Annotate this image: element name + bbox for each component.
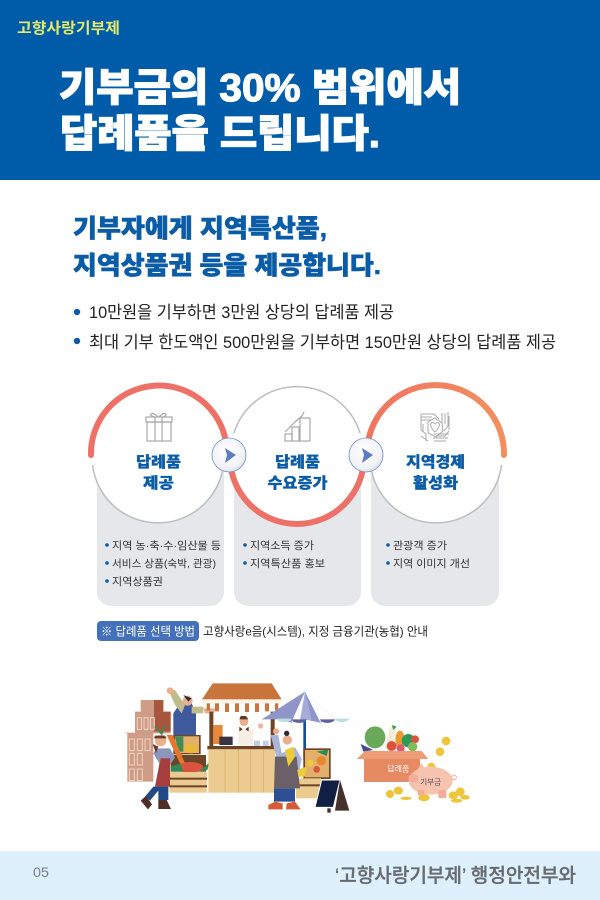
- list: 지역소득 증가: [250, 540, 314, 552]
- bullet list: 최대 기부 한도액인 500만원을 기부하면 150만원 상당의 답례품 제공: [89, 333, 556, 352]
- cycle diagram: [91, 385, 504, 606]
- bullet list: [74, 303, 556, 352]
- panel: 지역경제 활성화: [368, 385, 504, 606]
- list: 지역특산품 홍보: [250, 557, 325, 570]
- vendor in blue: [167, 687, 217, 735]
- icon: bar chart: [285, 412, 310, 441]
- bullet list: 10만원을 기부하면 3만원 상당의 답례품 제공: [89, 303, 394, 322]
- produce stand right: [296, 748, 331, 798]
- list: 지역상품권: [112, 576, 163, 588]
- panel: 지역경제 활성화: 활성화: [413, 474, 458, 492]
- footer band: [0, 851, 600, 900]
- list: 서비스 상품(숙박, 관광): [112, 558, 216, 570]
- title: 답례품을 드립니다.: [60, 113, 380, 156]
- subheading: 기부자에게 지역특산품,: [73, 215, 327, 243]
- panel: 답례품 제공: [91, 386, 226, 606]
- footer text: ‘고향사랑기부제’ 행정안전부와: [335, 865, 576, 887]
- list: [243, 540, 325, 570]
- woman with flowers: [268, 728, 307, 809]
- icon: hands and heart: [421, 412, 449, 441]
- sign board: [315, 780, 349, 813]
- list: [105, 539, 221, 588]
- vegetables: [361, 725, 419, 752]
- piggy bank: 기부금: [420, 777, 441, 786]
- list: 지역 농·축·수·임산물 등: [112, 539, 221, 552]
- produce crates left: [169, 735, 210, 793]
- illustration: gift box and piggy bank: [357, 725, 470, 803]
- title: 기부금의 30% 범위에서: [59, 67, 461, 110]
- panel: 답례품 수요증가: [230, 387, 364, 606]
- subheading: [73, 215, 381, 280]
- box: 답례품: [387, 764, 409, 774]
- chef: [238, 730, 253, 745]
- panel: 답례품 제공: 답례품: [136, 454, 181, 471]
- list: 관광객 증가: [393, 540, 447, 552]
- illustration: market: [125, 683, 349, 813]
- umbrella: [262, 692, 349, 760]
- title: [59, 67, 461, 156]
- subheading: 지역상품권 등을 제공합니다.: [73, 252, 381, 280]
- header label: 고향사랑기부제: [17, 20, 120, 37]
- buildings: [125, 700, 171, 782]
- selection method note: [97, 621, 428, 641]
- coins: [386, 737, 470, 803]
- list: [386, 540, 470, 570]
- selection method note: ※ 답례품 선택 방법: [101, 624, 195, 638]
- panel: 답례품 제공: 제공: [143, 474, 174, 492]
- page number: 05: [33, 864, 49, 880]
- panel: 답례품 수요증가: 수요증가: [268, 475, 328, 492]
- header band: [0, 0, 600, 180]
- woman with carrots: [141, 725, 185, 809]
- arrow 1: [212, 438, 246, 472]
- list: 지역 이미지 개선: [393, 558, 470, 570]
- panel: 지역경제 활성화: 지역경제: [406, 453, 465, 471]
- stall: [202, 683, 282, 793]
- icon: gift: [146, 413, 172, 441]
- selection method note: 고향사랑e음(시스템), 지정 금융기관(농협) 안내: [203, 624, 428, 638]
- panel: 답례품 수요증가: 답례품: [275, 454, 320, 471]
- arrow 2: [349, 438, 383, 472]
